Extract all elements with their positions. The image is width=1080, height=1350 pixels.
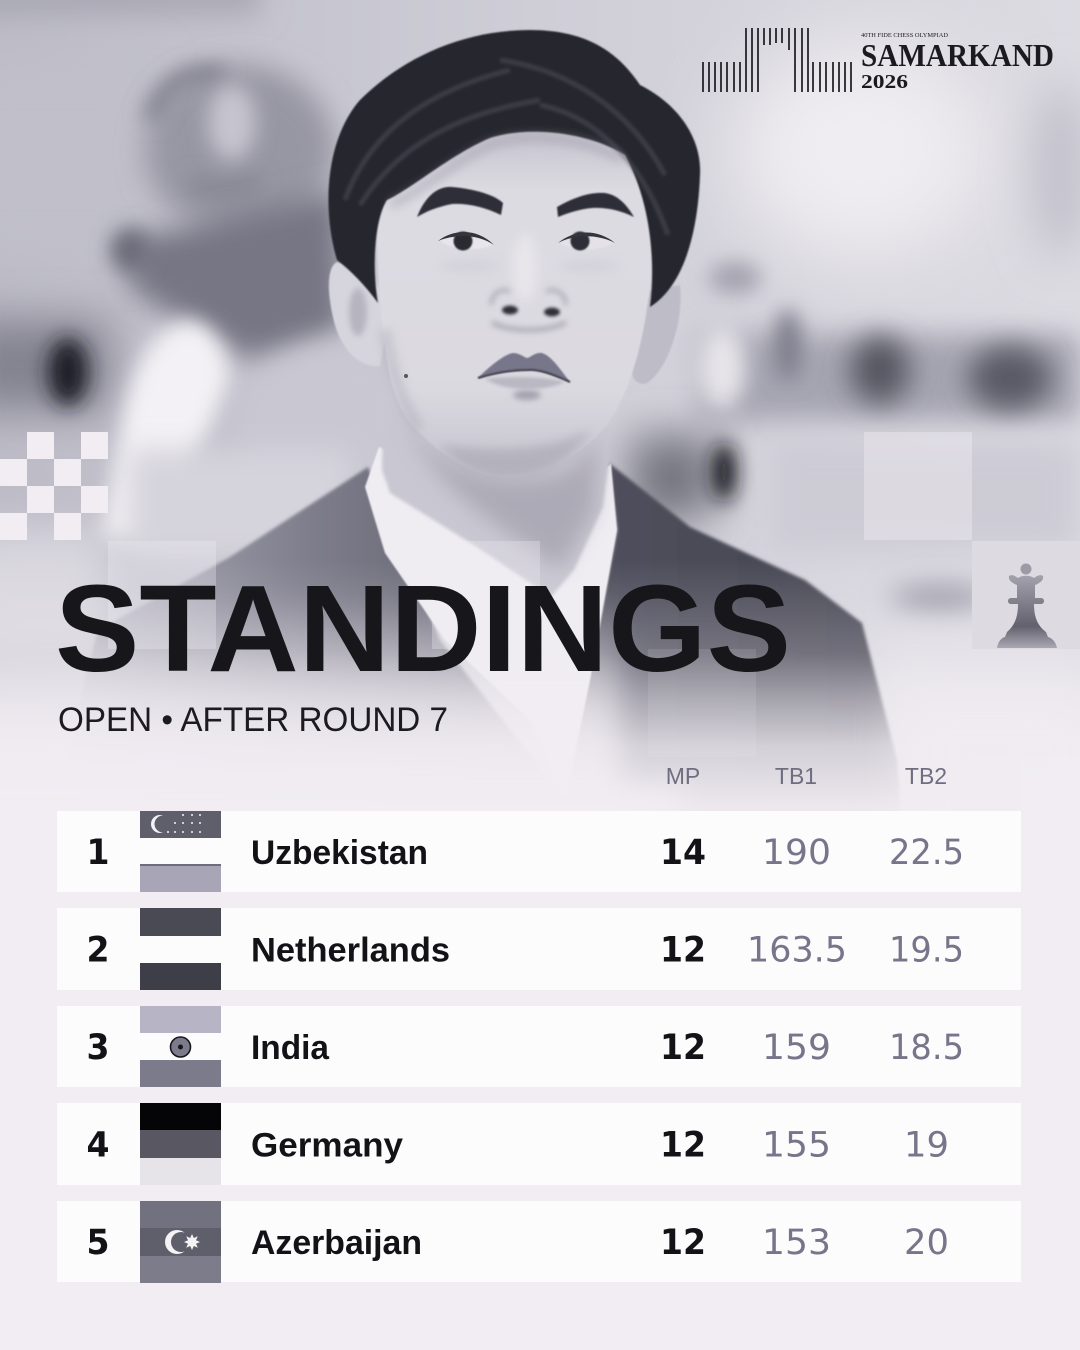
- shirt: [364, 447, 618, 722]
- country name: India: [251, 1029, 330, 1067]
- country name: Netherlands: [251, 932, 450, 970]
- TB1: 190: [762, 833, 831, 873]
- rank: 5: [86, 1223, 110, 1263]
- blurred background: right side: [730, 40, 990, 260]
- rank: 1: [86, 833, 110, 873]
- table column headers: [666, 763, 947, 789]
- table row 5: Azerbaijan: [57, 1201, 1021, 1283]
- TB1: 155: [762, 1126, 831, 1166]
- nose: [515, 240, 535, 296]
- jacket: [92, 462, 898, 797]
- table column headers: TB1: [775, 763, 817, 789]
- eyes: [442, 237, 492, 249]
- TB1: 159: [762, 1028, 831, 1068]
- translucent checker tiles: [108, 432, 1080, 865]
- flag: Netherlands: [140, 908, 221, 990]
- title: STANDINGS: [55, 561, 791, 698]
- logo wordmark: SAMARKAND: [861, 37, 1054, 73]
- rank: 3: [86, 1028, 110, 1068]
- blurred background: left person: [0, 0, 260, 15]
- hair shadow on forehead: [390, 138, 622, 205]
- table column headers: MP: [666, 763, 700, 789]
- logo small caption: 40TH FIDE CHESS OLYMPIAD: [861, 32, 948, 39]
- face: [376, 133, 652, 450]
- checker pattern decoration: [0, 432, 108, 540]
- photo: player portrait with blurred hall: [0, 0, 1080, 802]
- TB2: 22.5: [889, 833, 964, 873]
- logo mark: arch of vertical bars: [703, 28, 851, 92]
- TB2: 20: [904, 1223, 949, 1263]
- country name: Azerbaijan: [251, 1224, 422, 1262]
- TB2: 19.5: [889, 930, 964, 970]
- country name: Uzbekistan: [251, 834, 428, 872]
- chin stubble shadow: [445, 433, 586, 478]
- flag: Azerbaijan: [140, 1201, 221, 1283]
- rank: 2: [86, 930, 110, 970]
- table row 4: Germany: [57, 1103, 1021, 1185]
- ears: [328, 262, 383, 366]
- logo: Samarkand 2026 Chess Olympiad: [703, 28, 1054, 93]
- MP: 12: [660, 1126, 706, 1166]
- MP: 12: [660, 930, 706, 970]
- flag: Germany: [140, 1103, 221, 1185]
- logo year: 2026: [861, 71, 908, 93]
- MP: 14: [660, 833, 706, 873]
- TB1: 163.5: [747, 930, 847, 970]
- flag: India: [140, 1006, 221, 1087]
- flag: Uzbekistan: [140, 811, 221, 892]
- icon: queen chess piece on tile: [972, 541, 1080, 649]
- neck: [381, 448, 609, 596]
- country name: Germany: [251, 1126, 403, 1164]
- rank: 4: [86, 1126, 110, 1166]
- TB2: 19: [904, 1126, 949, 1166]
- MP: 12: [660, 1223, 706, 1263]
- eyebrows: [417, 187, 503, 217]
- TB1: 153: [762, 1223, 831, 1263]
- mouth: [478, 353, 570, 382]
- fades to page colour: [0, 560, 1080, 870]
- subtitle: OPEN • AFTER ROUND 7: [58, 701, 448, 739]
- table row 3: India: [57, 1006, 1021, 1087]
- table column headers: TB2: [905, 763, 947, 789]
- hair: [328, 30, 700, 307]
- table row 2: Netherlands: [57, 908, 1021, 990]
- TB2: 18.5: [889, 1028, 964, 1068]
- table row 1: Uzbekistan: [57, 811, 1021, 892]
- mole: [404, 374, 408, 378]
- hair strands: [345, 60, 668, 235]
- MP: 12: [660, 1028, 706, 1068]
